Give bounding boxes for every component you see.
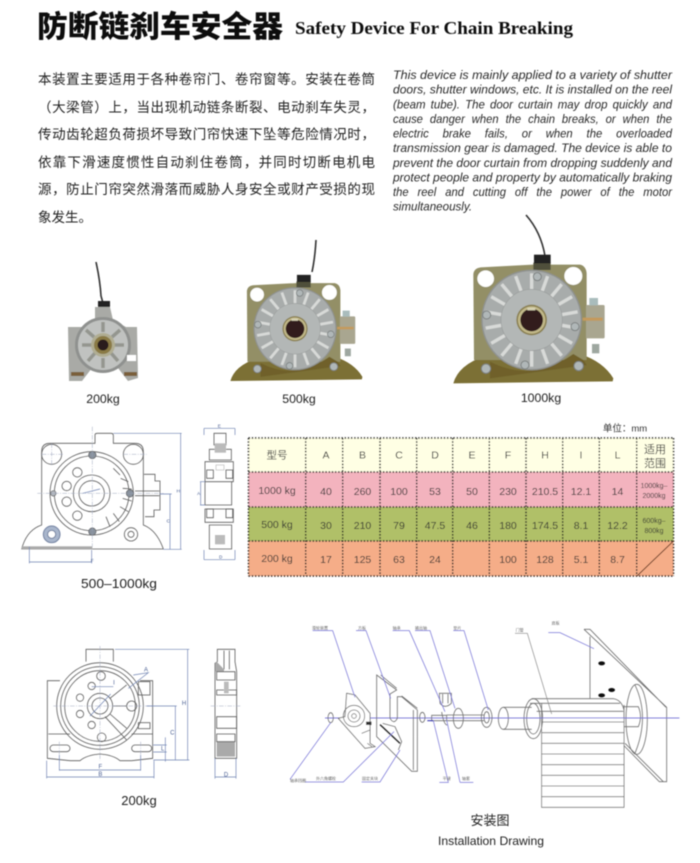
part labels: [312, 620, 560, 781]
front view: [22, 427, 182, 564]
part labels: 方板: [358, 624, 366, 630]
front view: F: [91, 558, 94, 564]
text block: Chinese description: 源，防止门帘突然滑落而威胁人身安全或财产受损的现: [38, 181, 375, 197]
table row: 1000 kg: 2000kg: [643, 493, 666, 500]
front view: B: [98, 772, 102, 778]
part labels: 滑轮装置: [312, 624, 328, 630]
table row: 500 kg: 210: [354, 520, 371, 532]
axis line: [325, 717, 679, 719]
side view: [197, 423, 235, 560]
front view: A: [144, 668, 148, 674]
table row: 500 kg: 180: [499, 520, 517, 532]
side view: E: [218, 423, 221, 428]
leader lines: [290, 631, 594, 782]
part labels: 平键: [443, 775, 451, 781]
front view: L: [161, 747, 165, 753]
table row: 500 kg: 174.5: [532, 520, 558, 532]
part labels: 垫片: [453, 624, 461, 630]
table header row: 型号: [266, 448, 288, 462]
part labels: 输出轴: [415, 624, 427, 630]
text block: English description: [392, 69, 673, 214]
table header row: C: [395, 450, 403, 462]
text block: English description: This device is mainly applied to a variety of shutter: [393, 69, 673, 82]
table header row: 范围: [644, 456, 666, 470]
text block: English description: prevent the door curtain from dropping suddenly and: [392, 157, 673, 170]
table row: 200 kg: 24: [429, 554, 441, 566]
caption: 200kg: 200kg: [86, 392, 120, 406]
photo: 1000kg device: [453, 215, 613, 383]
table row: 1000 kg: 1000kg–: [641, 483, 668, 490]
component: safety device: [328, 693, 402, 750]
technical drawing: 200kg: [47, 646, 241, 779]
table row: 1000 kg: 260: [354, 486, 371, 498]
table header row: A: [322, 450, 330, 462]
front view: C: [167, 518, 171, 524]
component: mounting bracket: [377, 675, 417, 771]
caption: installation drawing English: Installation Drawing: [438, 834, 544, 848]
text block: Chinese description: （大梁管）上，当出现机动链条断裂、电动刹车失灵，: [38, 99, 375, 115]
component: door tube and curtain: [325, 629, 679, 807]
table row: 200 kg: 17: [320, 554, 332, 566]
part labels: 门管: [516, 626, 524, 632]
caption: installation drawing Chinese: 安装图: [470, 813, 510, 828]
table row: 1000 kg: 230: [499, 486, 517, 498]
text block: Chinese description: 象发生。: [38, 210, 92, 225]
text block: Chinese description: 本装置主要适用于各种卷帘门、卷帘窗等。安装在卷筒: [38, 71, 375, 87]
front view: I: [113, 680, 115, 686]
title: [37, 10, 573, 44]
table row: 500 kg: 47.5: [425, 520, 445, 532]
specification table: [248, 438, 674, 576]
table row: 1000 kg: [258, 483, 668, 500]
part labels: 轴套: [462, 775, 470, 781]
table row: 1000 kg: 100: [390, 486, 408, 498]
table header row: B: [359, 450, 366, 462]
text block: English description: doors, shutter windows, etc. It is installed on the reel: [393, 84, 672, 97]
table row fills: [248, 438, 674, 576]
table header row: E: [468, 450, 476, 462]
table row: 500 kg: 79: [393, 520, 405, 532]
front view: F: [99, 764, 103, 770]
table row: 200 kg: 128: [536, 554, 554, 566]
side view: D: [219, 555, 223, 560]
table header row: 适用: [644, 443, 666, 456]
table header row: I: [580, 450, 582, 462]
front view: H: [182, 701, 186, 707]
table row: 200 kg: 5.1: [574, 554, 588, 566]
installation drawing: [290, 620, 679, 807]
table header row: H: [541, 450, 549, 462]
front view: C: [170, 730, 175, 736]
part labels: 轴承: [393, 624, 401, 630]
part labels: 固定夹块: [362, 775, 378, 781]
text block: English description: the reel and cutting off the power of the motor: [393, 186, 673, 199]
text block: Chinese description: [38, 71, 375, 225]
text block: English description: simultaneously.: [393, 201, 472, 214]
table row: 1000 kg: 14: [612, 486, 623, 498]
unit label: 单位：mm: [603, 422, 647, 434]
part labels: 底板: [552, 620, 560, 626]
table header row: L: [615, 450, 621, 462]
table row: 500 kg: [261, 518, 666, 535]
table row: 1000 kg: 1000 kg: [258, 485, 296, 497]
table row: 500 kg: 500 kg: [261, 519, 293, 531]
table row: 1000 kg: 210.5: [532, 486, 558, 498]
component: shaft, washers and key: [420, 693, 492, 728]
technical drawing: 500-1000kg: [22, 423, 235, 564]
caption: 200kg drawing: 200kg: [121, 793, 157, 808]
table row: 500 kg: 600kg–: [643, 518, 666, 525]
table row: 200 kg: 200 kg: [261, 553, 293, 565]
table row: 500 kg: 800kg: [644, 528, 664, 535]
table row: 200 kg: 125: [354, 554, 371, 566]
table row: 200 kg: 63: [393, 554, 405, 566]
text block: English description: transmission gear is damaged. The device is able to: [393, 142, 673, 155]
caption: 1000kg: 1000kg: [521, 391, 561, 405]
table row: 1000 kg: 50: [466, 486, 478, 498]
lower-left part label: 轴承挡圈: [290, 777, 306, 783]
side view: [211, 649, 241, 779]
table row: 200 kg: 8.7: [610, 554, 625, 566]
title: English: Safety Device For Chain Breaking: [295, 18, 573, 38]
text block: Chinese description: 依靠下滑速度惯性自动刹住卷筒，并同时切断电机电: [38, 154, 375, 170]
table row: 1000 kg: 40: [320, 486, 332, 498]
text block: English description: cause danger when the chain breaks, or when the: [393, 113, 673, 126]
table row: 500 kg: 46: [466, 520, 478, 532]
photo: 500kg device: [230, 240, 362, 381]
text block: English description: electric brake fails, or when the overloaded: [393, 128, 673, 140]
text block: Chinese description: 传动齿轮超负荷损坏导致门帘快速下坠等危险情况时，: [38, 126, 375, 142]
table row: 500 kg: 30: [320, 520, 332, 532]
text block: English description: (beam tube). The door curtain may drop quickly and: [393, 98, 673, 111]
caption: 500-1000kg: 500–1000kg: [81, 577, 157, 591]
table row: 1000 kg: 53: [429, 486, 441, 498]
table header row: D: [431, 450, 439, 462]
table header row: [266, 443, 666, 470]
part labels: 外六角螺栓: [316, 775, 336, 781]
table row: 200 kg: [261, 553, 625, 566]
table row: 1000 kg: 12.1: [571, 486, 591, 498]
table row: 500 kg: 8.1: [574, 520, 588, 532]
title: Chinese: 防断链刹车安全器: [37, 10, 283, 44]
side view: A: [197, 491, 201, 496]
side view: D: [224, 772, 229, 778]
table row: 200 kg: 100: [499, 554, 517, 566]
front view: H: [177, 488, 181, 494]
table row: 500 kg: 12.2: [607, 520, 628, 532]
caption: 500kg: 500kg: [282, 392, 316, 406]
photo: 200kg device: [68, 262, 138, 381]
front view: [47, 646, 189, 778]
text block: English description: protect people and property by automatically braking: [392, 171, 673, 184]
table header row: F: [505, 450, 511, 462]
